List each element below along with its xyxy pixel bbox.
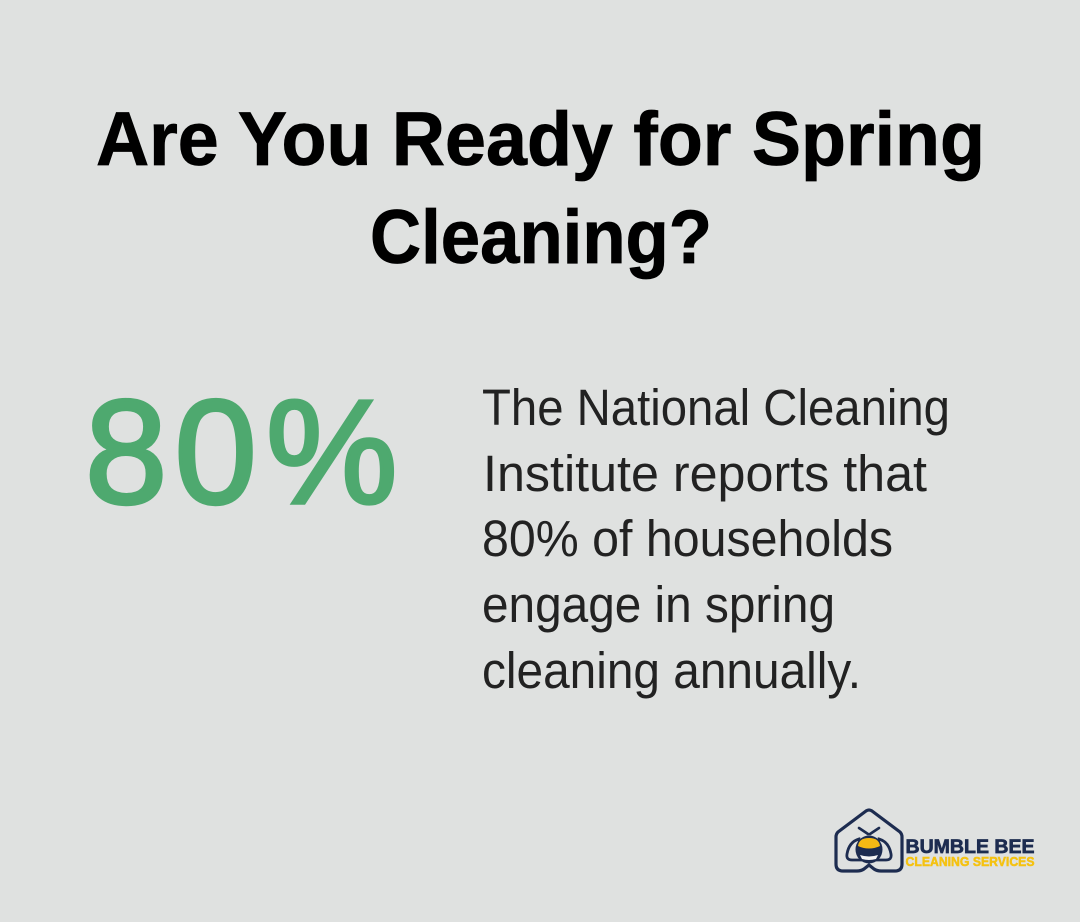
title: Cleaning?	[370, 195, 712, 280]
statistic: 80%: 80%	[85, 370, 398, 535]
description text: The National Cleaning	[482, 379, 950, 436]
description text: cleaning annually.	[482, 642, 861, 699]
description text: Institute reports that	[483, 445, 927, 502]
description text: engage in spring	[482, 576, 835, 633]
logo: Bumble Bee Cleaning Services	[836, 810, 1034, 871]
title: Are You Ready for Spring	[96, 97, 985, 182]
icon: house outline	[836, 810, 902, 871]
icon: bee	[847, 828, 891, 864]
title	[96, 97, 985, 280]
logo tagline: CLEANING SERVICES	[906, 855, 1034, 869]
logo wordmark: BUMBLE BEE	[906, 836, 1034, 858]
description text	[482, 379, 950, 699]
description text: 80% of households	[482, 510, 893, 567]
